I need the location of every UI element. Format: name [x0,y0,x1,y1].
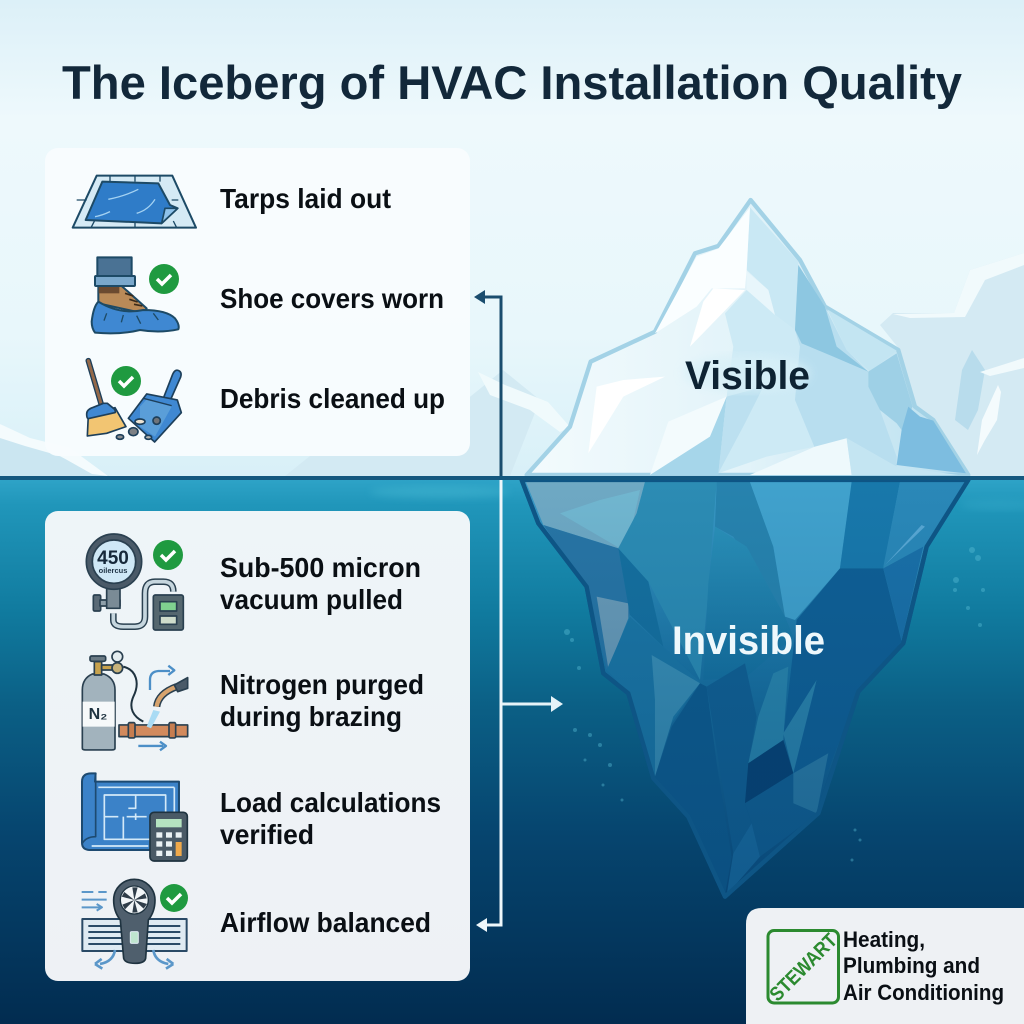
gauge unit: oilercus [99,566,127,575]
logo text [843,927,1004,1005]
text: load [220,787,441,850]
icon: check [153,540,183,570]
text: nitrogen [220,669,424,732]
visible outline and base [527,200,968,475]
title: The Iceberg of HVAC Installation Quality [62,56,962,109]
logo text: Heating, [843,927,925,952]
visible iceberg [527,200,968,475]
icon: broom and dustpan [87,361,181,442]
logo mark: STEWART [766,930,842,1006]
panel: logo [746,908,1024,1024]
text: vacuum: Sub-500 micron [220,552,421,583]
logo text: Plumbing and [843,953,980,978]
text: debris: Debris cleaned up [220,383,445,414]
label: invisible: Invisible [672,619,825,663]
text: load: verified [220,819,314,850]
waterline glow [370,486,1024,510]
icon: check [149,264,179,294]
text: vacuum: vacuum pulled [220,584,403,615]
panel: visible items [45,148,470,456]
submerged outline and base [522,480,968,897]
icon: check [111,366,141,396]
submerged shading [522,480,968,897]
text: shoe covers: Shoe covers worn [220,283,444,314]
icon: check [160,884,188,912]
arrow to iceberg [502,702,553,706]
text: nitrogen: Nitrogen purged [220,669,424,700]
sky background [0,0,1024,478]
water background [0,478,1024,1024]
logo text: Air Conditioning [843,980,1004,1005]
text: vacuum [220,552,421,615]
icon: tarp [73,176,196,228]
panel: invisible items [45,511,470,981]
icon: nitrogen tank and torch [82,651,188,750]
text: load: Load calculations [220,787,441,818]
icon: micron gauge [86,534,183,630]
visible facets [588,207,966,475]
text: nitrogen: during brazing [220,701,402,732]
submerged iceberg [522,480,968,897]
arrow to hidden panel [484,480,501,925]
icon: anemometer [82,879,187,969]
text: tarps: Tarps laid out [220,183,391,214]
distant ice left [0,370,570,476]
nitrogen tank label: N₂ [89,706,107,723]
icon: shoe cover [92,257,179,333]
waterline [0,476,1024,480]
bubbles [564,547,985,862]
visible label glow [683,355,810,392]
text: airflow: Airflow balanced [220,907,431,938]
arrow to visible panel [482,297,501,476]
distant ice right [880,253,1024,476]
icon: blueprint and calculator [82,773,187,861]
submerged facets [526,482,967,895]
gauge reading: 450 [97,548,129,569]
connector bracket [474,290,563,932]
label: visible: Visible [685,354,810,398]
